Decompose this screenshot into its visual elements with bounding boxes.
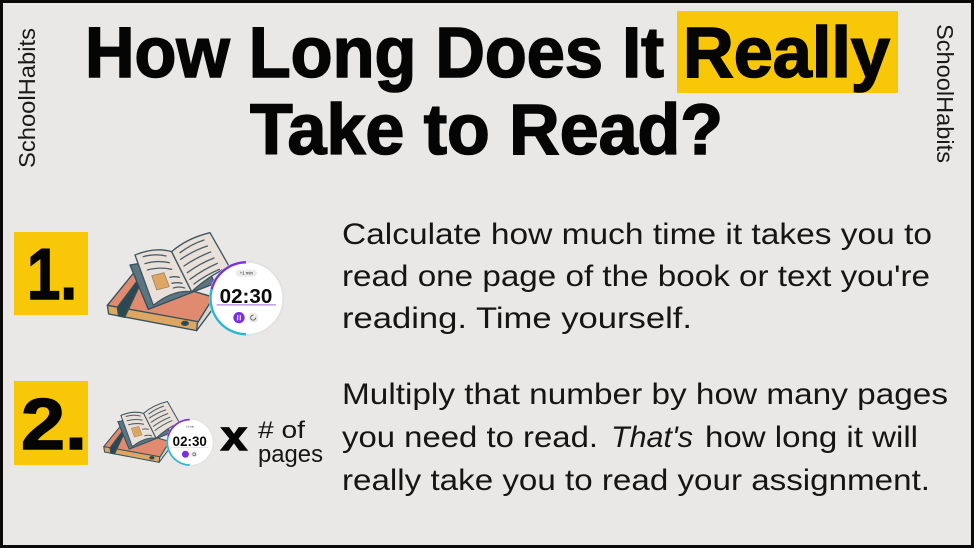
left side brand label: SchoolHabits [14,28,40,168]
step 2 instructions: really take you to read your assignment. [342,464,930,497]
icon: book and timer, step 2 [104,402,213,465]
right side brand label: SchoolHabits [932,24,958,163]
number of pages label: # of [258,417,305,444]
step 2 instructions: how long it will [705,421,918,454]
multiplication sign: x [221,412,248,459]
step 2 instructions: That's [611,421,693,454]
title: How Long Does It [85,14,664,93]
title: Really [683,14,891,93]
step 1 instructions [342,218,932,335]
closed book [107,253,215,331]
highlight box behind the word Really [677,11,898,93]
step 1 number badge: 1. [27,235,77,315]
icon: book and timer, step 2: 02:30 [173,433,207,449]
step 1 instructions: read one page of the book or text you're [342,260,930,293]
number of pages label [258,417,323,468]
step 2 number badge: 2. [21,385,87,465]
step 2 instructions: Multiply that number by how many pages [342,378,948,411]
step 1 instructions: Calculate how much time it takes you to [342,218,932,251]
timer dial [167,419,213,465]
page lines [126,406,172,436]
icon: book and timer, step 2: +1 min [186,425,194,429]
timer dial [210,262,283,335]
open book pages [135,233,229,305]
closed book [104,414,171,462]
number of pages label: pages [258,441,323,468]
step 2 instructions: you need to read. [342,421,598,454]
icon: book and timer, step 1: 02:30 [220,285,272,308]
page lines [143,240,219,288]
title: Take to Read? [250,91,723,170]
step 1 instructions: reading. Time yourself. [342,302,692,335]
icon: book and timer, step 1 [107,233,283,335]
title [85,14,891,170]
step 2 instructions [342,378,948,497]
open book pages [121,402,179,447]
icon: book and timer, step 1: +1 min [240,271,253,276]
